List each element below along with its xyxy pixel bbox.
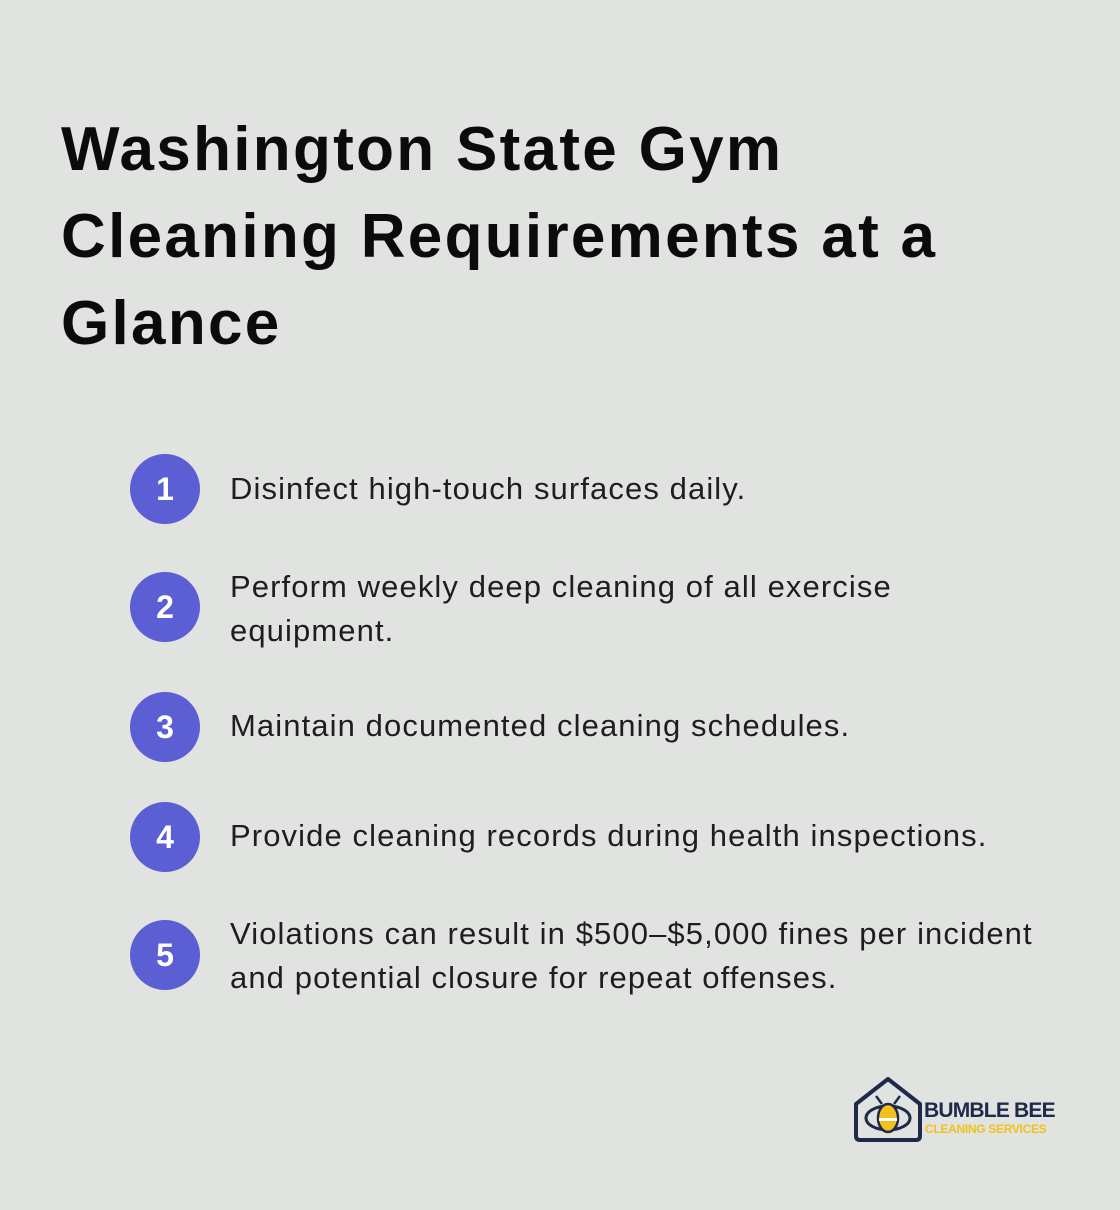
item 4: Provide cleaning records during health inspections.	[230, 818, 987, 853]
item 1: Disinfect high-touch surfaces daily.	[230, 471, 746, 506]
item 5: Violations can result in $500–$5,000 fines per incident	[230, 916, 1033, 951]
title: Cleaning Requirements at a	[61, 202, 937, 271]
item 3: Maintain documented cleaning schedules.	[230, 708, 850, 743]
item 1: 1	[156, 471, 174, 507]
item 5: 5	[156, 937, 174, 973]
logo text: BUMBLE BEE	[924, 1099, 1055, 1122]
logo: CLEANING SERVICES	[925, 1122, 1046, 1136]
item 2: Perform weekly deep cleaning of all exercise	[230, 569, 892, 604]
title: Washington State Gym	[61, 115, 783, 184]
title: Glance	[61, 289, 282, 358]
item 3	[130, 692, 850, 762]
item 1	[130, 454, 746, 524]
item 5	[130, 916, 1033, 995]
title	[61, 115, 937, 358]
item 4: 4	[156, 819, 174, 855]
item 2: 2	[156, 589, 174, 625]
item 2: equipment.	[230, 613, 394, 648]
icon: bee house	[854, 1077, 922, 1142]
item 4	[130, 802, 987, 872]
logo	[854, 1077, 1055, 1142]
item 5: and potential closure for repeat offenses.	[230, 960, 837, 995]
item 2	[130, 569, 892, 648]
item 3: 3	[156, 709, 174, 745]
